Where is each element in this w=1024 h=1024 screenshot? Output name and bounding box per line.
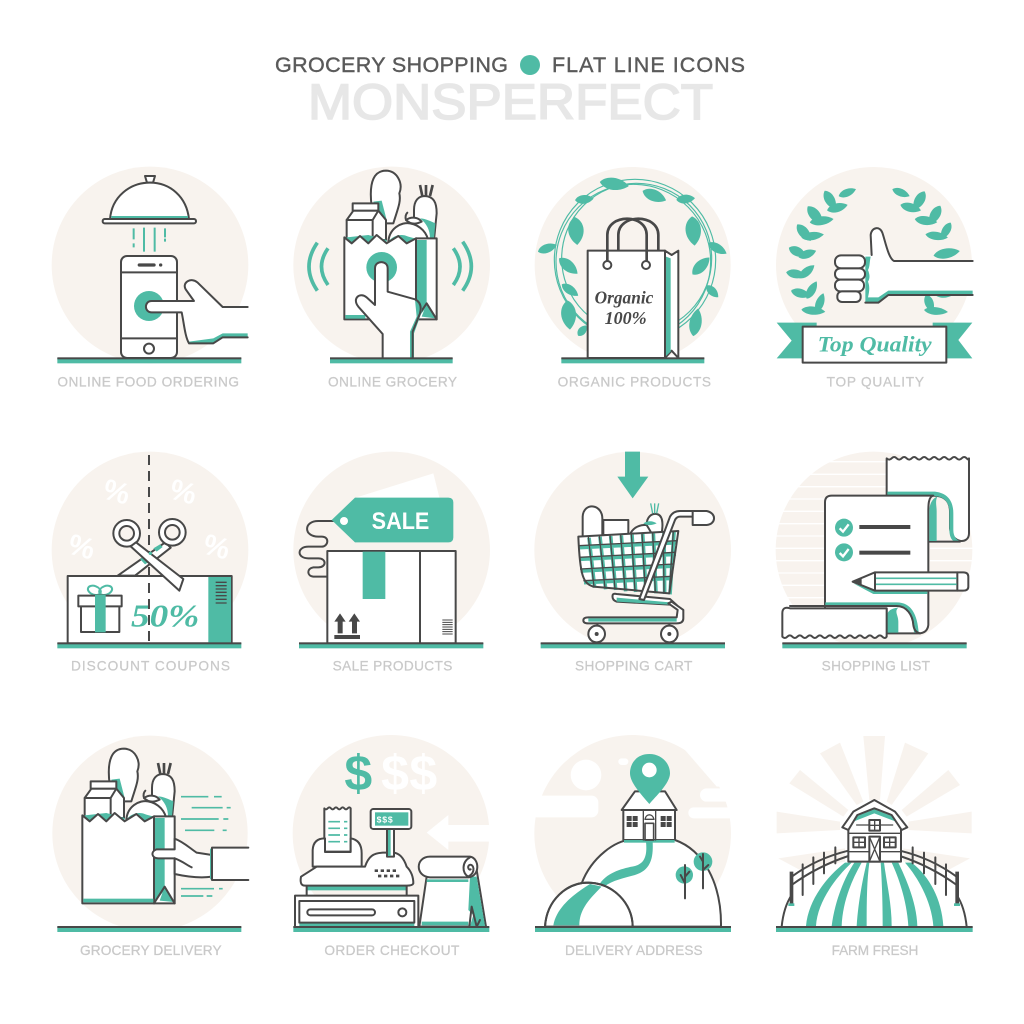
icon: title dot: [520, 55, 540, 75]
icon: grocery bag: [344, 235, 437, 319]
percent marks: %: [65, 528, 98, 566]
panel: organic products: [535, 167, 731, 390]
percent marks: %: [200, 528, 233, 566]
label: TOP QUALITY: [827, 375, 924, 390]
icon: tapping hand: [356, 262, 422, 359]
row 2 left pair: [52, 452, 490, 674]
label: SALE PRODUCTS: [333, 659, 452, 674]
row 1 right pair: [535, 167, 973, 390]
icon: groceries: [347, 171, 437, 247]
label: SHOPPING CART: [575, 659, 693, 674]
display text: $$$: [377, 814, 393, 824]
panel: sale products: [293, 452, 490, 674]
panel: grocery delivery: [52, 736, 248, 958]
label: GROCERY DELIVERY: [80, 943, 222, 958]
heading: grocery shopping: GROCERY SHOPPING: [275, 53, 508, 77]
icon: cart frame: [583, 511, 714, 642]
icon: list sheet: [825, 496, 937, 633]
ground line: [57, 642, 241, 648]
icon: signal waves: [309, 242, 471, 291]
dollar signs: $: [381, 746, 409, 802]
arrow: [427, 815, 490, 850]
icon: pointing hand: [146, 280, 248, 344]
icon: cash register: [295, 807, 418, 927]
icon: small hill: [545, 883, 633, 927]
tag text: SALE: [372, 508, 429, 535]
icon: leaf wreath: [536, 176, 729, 341]
background clouds and moon: [530, 730, 740, 818]
label: DISCOUNT COUPONS: [71, 659, 230, 674]
row 3 right pair: [530, 730, 973, 958]
ground line: [57, 357, 241, 363]
label: ORDER CHECKOUT: [324, 943, 460, 958]
icon: trees: [676, 852, 712, 898]
label: ONLINE GROCERY: [328, 375, 457, 390]
icon: gift: [78, 584, 122, 632]
icon: cart basket: [578, 531, 678, 594]
panel: online grocery: [293, 167, 490, 390]
brand name: MONSPERFECT: [308, 74, 713, 130]
icon: laurel: [785, 186, 961, 316]
icon: sale tag: [332, 498, 453, 542]
panel: discount coupons: [52, 452, 248, 674]
ground line: [299, 642, 483, 648]
icon: striped field: [782, 862, 967, 927]
icon: barn: [842, 800, 907, 862]
label: SHOPPING LIST: [822, 659, 931, 674]
percent marks: [65, 473, 233, 566]
icon: thumbs up: [835, 228, 973, 303]
heading: flat line icons: FLAT LINE ICONS: [552, 53, 745, 77]
icon: scissors: [113, 519, 186, 591]
label: DELIVERY ADDRESS: [565, 943, 703, 958]
icon: paper roll: [419, 857, 486, 927]
ground line: [776, 926, 973, 932]
ground line: [535, 926, 731, 932]
panel: order checkout: [293, 735, 490, 958]
percent marks: %: [100, 473, 133, 511]
label: ONLINE FOOD ORDERING: [57, 375, 239, 390]
coupon value: 50%: [131, 598, 199, 634]
row 2 right pair: [534, 452, 977, 674]
dollar signs: $: [409, 746, 437, 802]
cut line: [146, 455, 152, 643]
sun rays: [777, 736, 972, 870]
icon: delivery hand: [152, 839, 248, 880]
icon: coupon: [68, 576, 232, 643]
ground line: [57, 926, 241, 932]
bag text: 100%: [605, 308, 647, 328]
icon: lower scroll: [782, 602, 920, 638]
icon: house: [622, 791, 677, 843]
panel: shopping cart: [534, 452, 731, 674]
icon: shopping bag: [588, 219, 678, 358]
bag text: Organic: [595, 287, 653, 307]
icon: grocery bag: [82, 813, 175, 903]
row 3 left pair: [52, 735, 490, 958]
ground line: [782, 642, 967, 648]
panel: online food ordering: [52, 167, 248, 390]
ground line: [541, 642, 725, 648]
label: ORGANIC PRODUCTS: [558, 375, 711, 390]
ground line: [330, 357, 453, 363]
percent marks: %: [166, 473, 200, 511]
ground line: [293, 926, 489, 932]
icon: back paper: [887, 457, 969, 542]
icon: ribbon banner: [777, 323, 972, 363]
icon: groceries: [85, 749, 175, 825]
panel: shopping list: [773, 452, 977, 674]
icon: pencil: [853, 572, 968, 594]
dollar signs: [344, 746, 437, 802]
icon: smartphone: [121, 256, 177, 358]
dollar signs: $: [344, 746, 372, 802]
icon: location pin: [630, 754, 670, 804]
icon: big hill: [582, 840, 721, 927]
title: [275, 53, 745, 130]
icon: string: [300, 521, 343, 577]
ground line: [561, 357, 704, 363]
icon: speed lines: [181, 797, 231, 896]
panel: farm fresh: [776, 736, 973, 958]
icon: down arrow: [617, 452, 648, 498]
panel: delivery address: [530, 730, 740, 958]
icon: cardboard box: [327, 551, 456, 643]
label: FARM FRESH: [832, 943, 918, 958]
panel: top quality: [776, 167, 973, 390]
icon: fence: [788, 847, 960, 906]
icon: cloche: [103, 176, 196, 252]
row 1 left pair: [52, 167, 490, 390]
banner text: Top Quality: [818, 332, 932, 357]
icon: cart contents: [583, 503, 662, 540]
